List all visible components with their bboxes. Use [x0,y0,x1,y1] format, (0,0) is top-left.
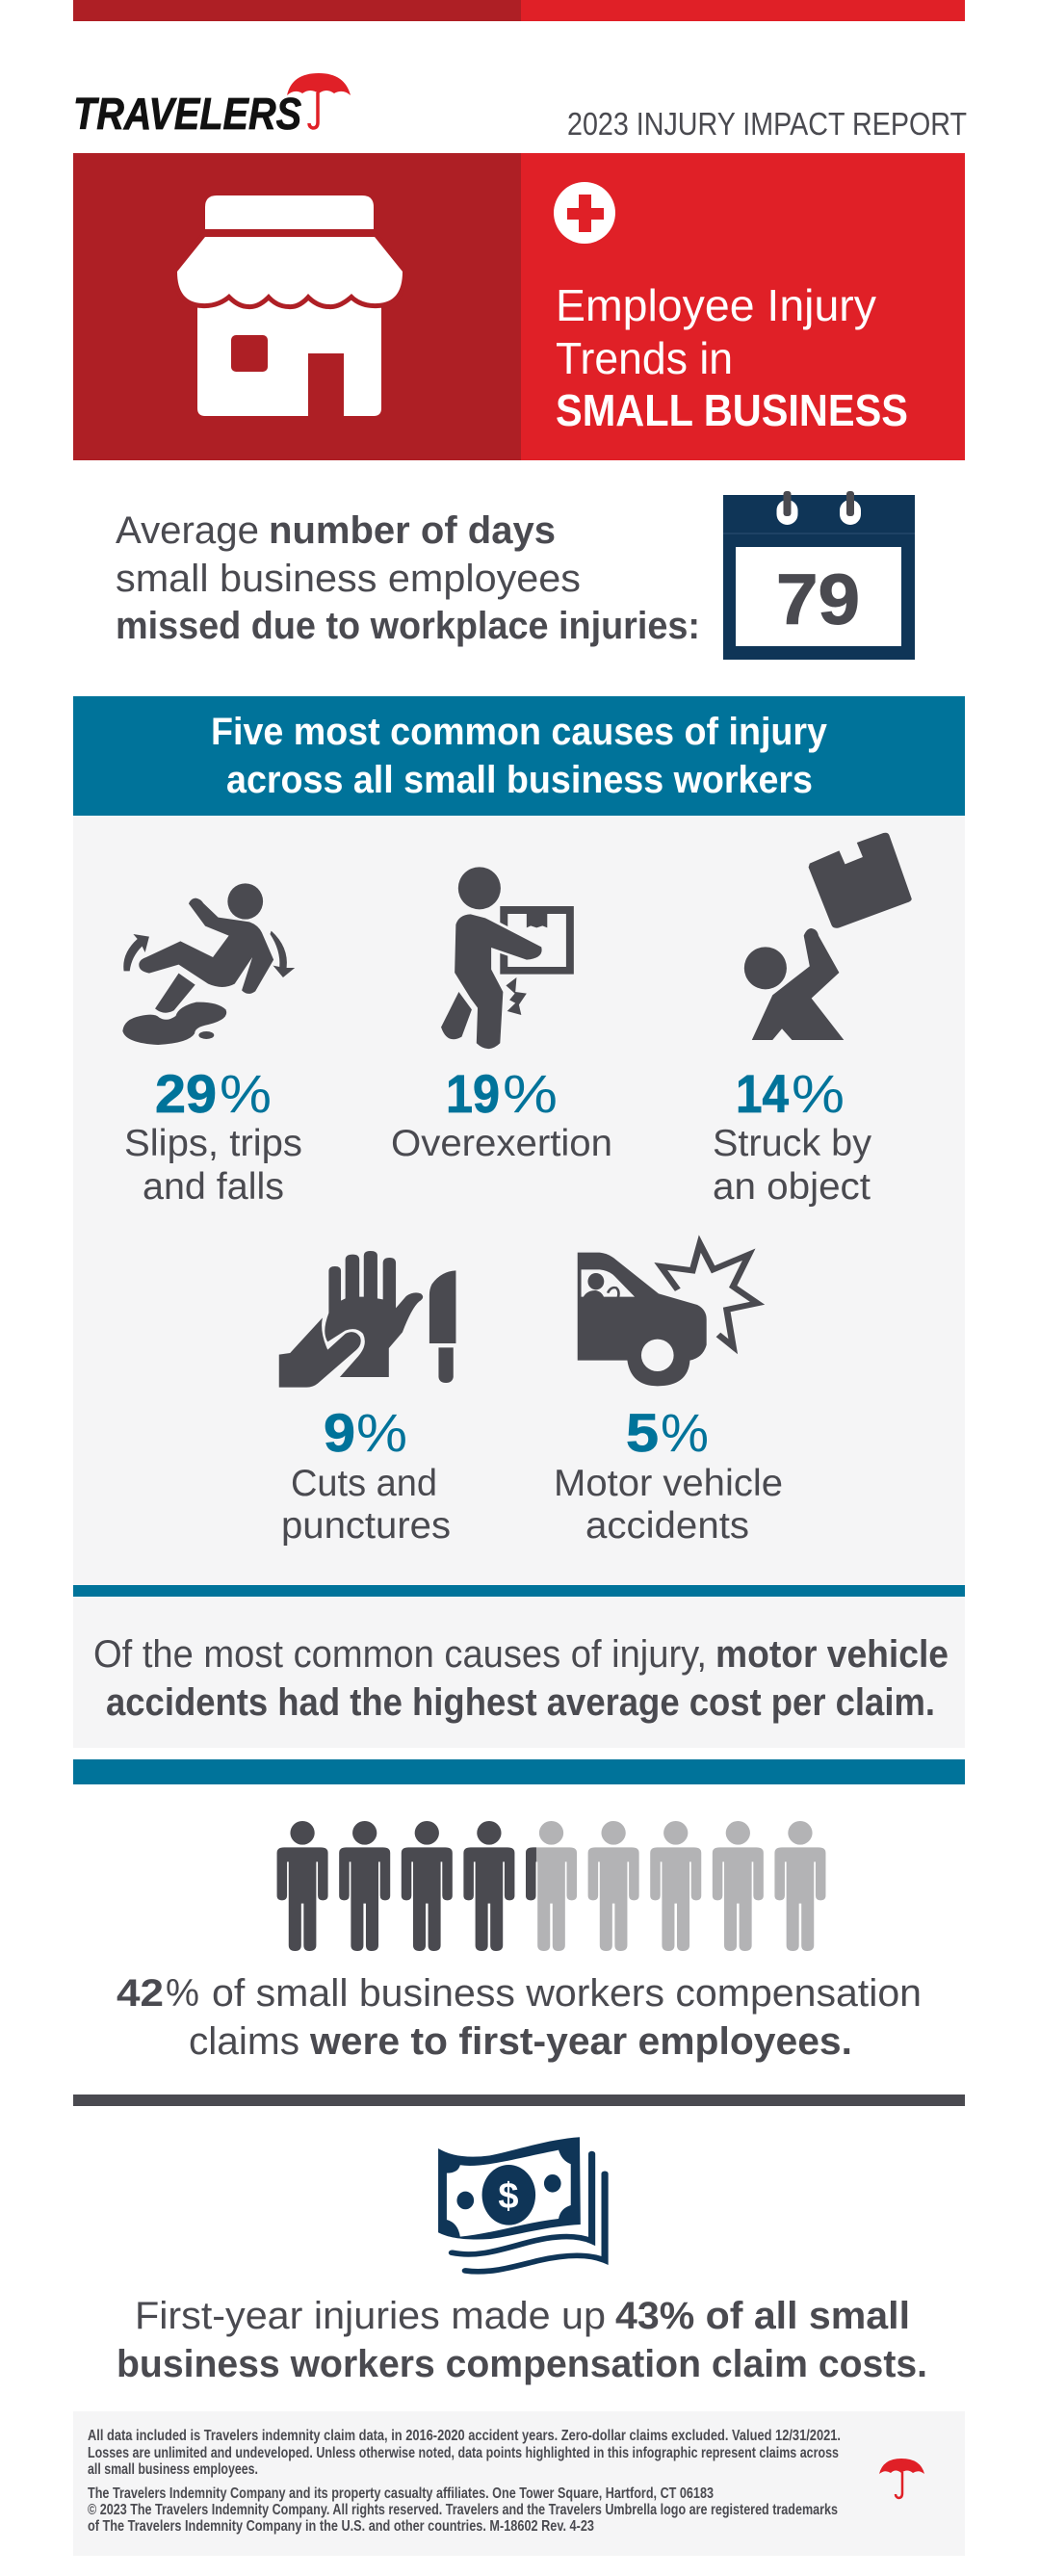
first-year costs text: First-year injuries made up [135,2295,606,2337]
hero title: Trends in [556,333,733,383]
first-year costs text: 43% of all small [615,2295,910,2337]
stat: struck by an object: % [792,1063,845,1124]
average days text: missed due to workplace injuries: [116,605,700,647]
icon: storefront [177,195,403,416]
stat: cuts and punctures: punctures [281,1505,451,1547]
panel: highest cost callout: Of the most common causes of injury, [93,1633,707,1676]
footnote text: of The Travelers Indemnity Company in the U.S. and other countries. M-18602 Rev. 4-23 [88,2518,594,2535]
icon: cut hand and knife [279,1251,455,1388]
stat: cuts and punctures [281,1402,451,1547]
average days text: number of days [269,509,556,552]
first-year claims text: claims [189,2020,299,2063]
stat: struck by an object: 14 [736,1063,789,1124]
stat: slips, trips and falls: % [220,1063,272,1124]
Travelers logo: TRAVELERS [73,89,301,139]
stat: cuts and punctures: 9 [324,1402,355,1463]
average days text: small business employees [116,558,581,600]
stat: motor vehicle accidents: 5 [626,1402,659,1463]
stat: overexertion: Overexertion [391,1123,612,1164]
footnote text [88,2428,841,2535]
footnote text: The Travelers Indemnity Company and its property casualty affiliates. One Tower Square, Hartford, CT 06183 [88,2485,714,2502]
banner: five most common causes: across all small business workers [226,759,813,801]
icon: car crash [578,1244,757,1386]
banner: five most common causes: Five most common causes of injury [211,711,828,753]
icon: struck by object [744,833,912,1040]
average days text: Average [116,509,259,552]
panel: highest cost callout: accidents had the highest average cost per claim. [106,1681,935,1724]
icon: stack of money [438,2137,605,2272]
icon: calendar with 79: 79 [776,559,860,639]
stat: overexertion: 19 [446,1063,500,1124]
footnote text: all small business employees. [88,2461,258,2478]
stat: cuts and punctures: Cuts and [291,1463,437,1504]
hero title [556,280,908,435]
footnote text: Losses are unlimited and undeveloped. Unless otherwise noted, data points highlighted in this infographic represent claims across [88,2445,839,2461]
icon: medical cross [554,182,615,244]
stat: motor vehicle accidents: Motor vehicle [554,1463,783,1504]
panel: highest cost callout [73,1597,965,1748]
stat: overexertion [391,1063,612,1164]
hero title: SMALL BUSINESS [556,385,908,435]
footnote text: © 2023 The Travelers Indemnity Company. All rights reserved. Travelers and the Travelers Umbrella logo are registered trademarks [88,2502,838,2518]
stat: motor vehicle accidents [554,1402,783,1547]
first-year claims text: % [166,1972,199,2015]
first-year claims text [117,1972,922,2063]
stat: struck by an object [713,1063,871,1208]
top colour band [73,0,965,21]
icon: slip and fall [122,883,295,1045]
first-year costs text [117,2295,927,2385]
icon: umbrella [879,2459,924,2498]
stat: cuts and punctures: % [356,1402,407,1463]
first-year claims text: were to first-year employees. [309,2020,852,2063]
stat: struck by an object: Struck by [713,1123,871,1164]
stat: overexertion: % [503,1063,558,1124]
panel: hero [73,153,965,460]
icon: calendar with 79 [723,491,915,660]
banner: five most common causes [73,696,965,816]
stat: slips, trips and falls [124,1063,302,1208]
first-year claims text: 42 [117,1972,164,2015]
stat: struck by an object: an object [713,1166,871,1208]
icon: stack of money: $ [498,2176,519,2217]
icon: row of nine people, 42% shaded [277,1821,825,1951]
stat: slips, trips and falls: and falls [143,1166,284,1208]
stat: slips, trips and falls: 29 [155,1063,217,1124]
stat: slips, trips and falls: Slips, trips [124,1123,302,1164]
first-year claims text: of small business workers compensation [212,1972,922,2015]
report label: 2023 INJURY IMPACT REPORT [567,106,967,142]
average days text [116,509,700,647]
panel: causes of injury [73,816,965,1585]
panel: highest cost callout: motor vehicle [715,1633,949,1676]
stat: motor vehicle accidents: % [661,1402,709,1463]
hero title: Employee Injury [556,280,876,330]
icon: overexertion [441,867,574,1049]
footnote text: All data included is Travelers indemnity claim data, in 2016-2020 accident years. Zero-dollar claims excluded. Valued 12/31/2021. [88,2428,841,2444]
stat: motor vehicle accidents: accidents [585,1505,749,1547]
first-year costs text: business workers compensation claim costs. [117,2343,927,2385]
panel: footer notes [73,2411,965,2556]
